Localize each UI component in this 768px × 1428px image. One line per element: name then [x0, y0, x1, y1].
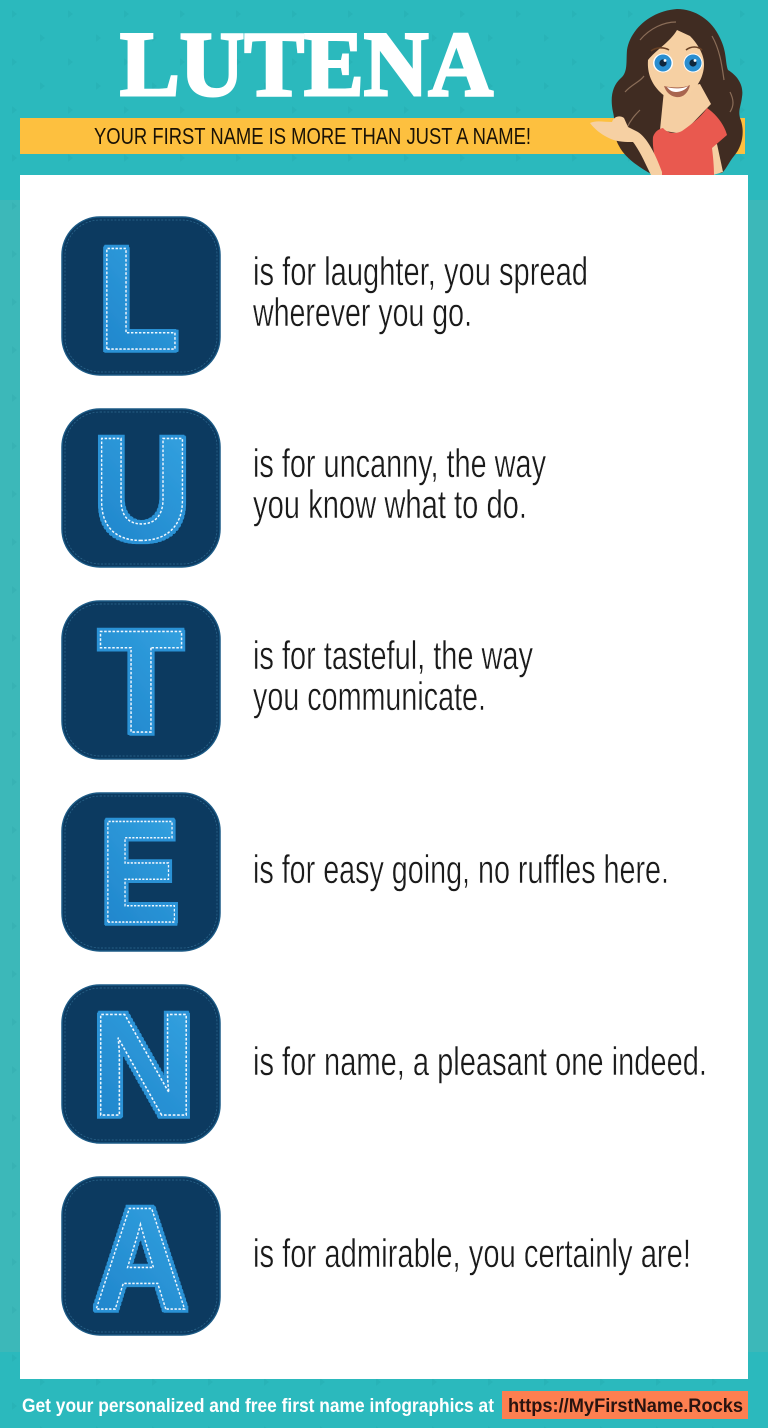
row 2: U tile: U [94, 407, 191, 570]
hair [612, 9, 743, 175]
row 6: A tile [62, 1177, 220, 1340]
right eye [684, 54, 702, 72]
row 4: E tile: E [100, 790, 179, 953]
arm and hand [590, 116, 662, 175]
shirt [653, 108, 727, 175]
subtitle banner [20, 118, 745, 154]
footer link badge: https://MyFirstName.Rocks [508, 1396, 743, 1417]
footer call to action: Get your personalized and free first name infographics at [22, 1396, 495, 1417]
row 1 text: wherever you go. [252, 291, 472, 335]
row 3: T tile: T [99, 600, 183, 763]
row 3 text: is for tasteful, the way [253, 634, 533, 678]
row 2 text: you know what to do. [253, 483, 527, 527]
subtitle banner: YOUR FIRST NAME IS MORE THAN JUST A NAME! [94, 123, 531, 149]
hair highlights [625, 22, 733, 130]
row 2 text: is for uncanny, the way [253, 442, 546, 486]
row 2: U tile [62, 407, 220, 570]
row 1 text: is for laughter, you spread [253, 250, 588, 294]
row 5: N tile: N [91, 983, 196, 1146]
row 3 text: you communicate. [253, 675, 486, 719]
neck and chest [660, 84, 711, 134]
row 3 text [253, 634, 533, 719]
row 6: A tile: A [93, 1177, 188, 1340]
row 2 text [253, 442, 546, 527]
row 1 text [252, 250, 588, 335]
face [648, 30, 704, 100]
row 3: T tile [62, 600, 220, 763]
character illustration [590, 9, 743, 175]
title: LUTENA [120, 13, 493, 115]
left eye [653, 54, 673, 72]
eyebrows [651, 47, 702, 51]
row 1: L tile: L [98, 217, 179, 380]
row 1: L tile [62, 217, 220, 380]
right arm [708, 144, 723, 175]
row 5: N tile [62, 983, 220, 1146]
main white panel [20, 175, 748, 1379]
smile [664, 85, 690, 97]
row 4: E tile [62, 790, 220, 953]
